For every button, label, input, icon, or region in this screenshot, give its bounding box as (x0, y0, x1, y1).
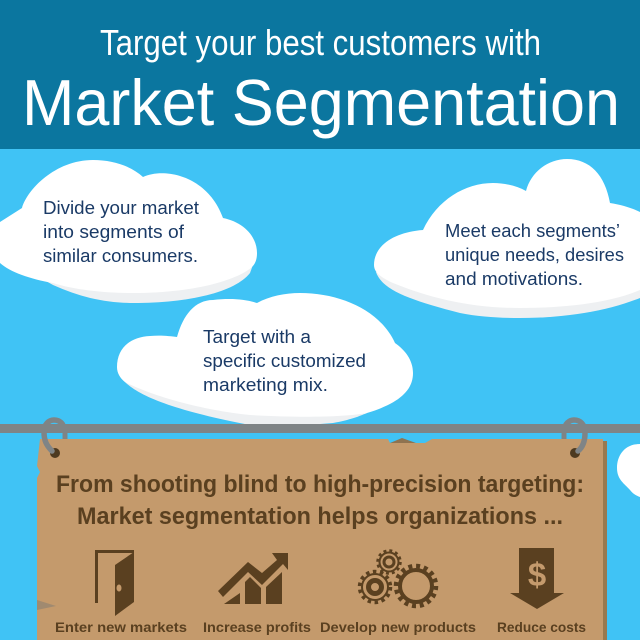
cloud text: marketing mix. (203, 375, 328, 395)
title line 1: Target your best customers with (100, 22, 541, 63)
cloud: divide your market (0, 160, 257, 303)
cloud text (203, 327, 366, 395)
right hook (564, 420, 585, 458)
cloud: target with a mix (117, 293, 413, 426)
heading: From shooting blind to high-precision targeting: (56, 471, 584, 498)
cloud text: similar consumers. (43, 246, 198, 266)
label: enter new markets: Enter new markets (55, 619, 187, 635)
cloud text: Divide your market (43, 198, 199, 218)
cloud text: into segments of (43, 222, 185, 242)
header banner (0, 0, 640, 149)
label: increase profits: Increase profits (203, 619, 311, 635)
heading: Market segmentation helps organizations ... (77, 503, 563, 530)
wooden sign (37, 438, 607, 640)
label: reduce costs: Reduce costs (497, 619, 586, 635)
label: develop new products: Develop new products (320, 619, 476, 635)
icon: door (95, 550, 134, 616)
heading (56, 471, 584, 530)
cloud text: unique needs, desires (445, 245, 624, 265)
cloud: meet each segment (374, 159, 640, 318)
left hook (44, 420, 64, 458)
cloud text: Target with a (203, 327, 312, 347)
cloud text: specific customized (203, 351, 366, 371)
hook backs behind the rope (65, 430, 564, 439)
icon: dollar down arrow: $ (528, 556, 546, 593)
title line 2: Market Segmentation (22, 66, 620, 139)
icon: dollar down arrow (510, 548, 564, 609)
torn corner flap (390, 438, 416, 443)
cloud text (43, 198, 199, 266)
hanging rope (0, 424, 640, 433)
small cloud at right edge (617, 444, 640, 497)
cloud text: Meet each segments’ (445, 221, 620, 241)
nail tear (37, 600, 56, 610)
cloud text: and motivations. (445, 269, 583, 289)
icon: gears (360, 550, 436, 606)
icon: rising chart (218, 553, 288, 604)
cloud text (445, 221, 624, 289)
